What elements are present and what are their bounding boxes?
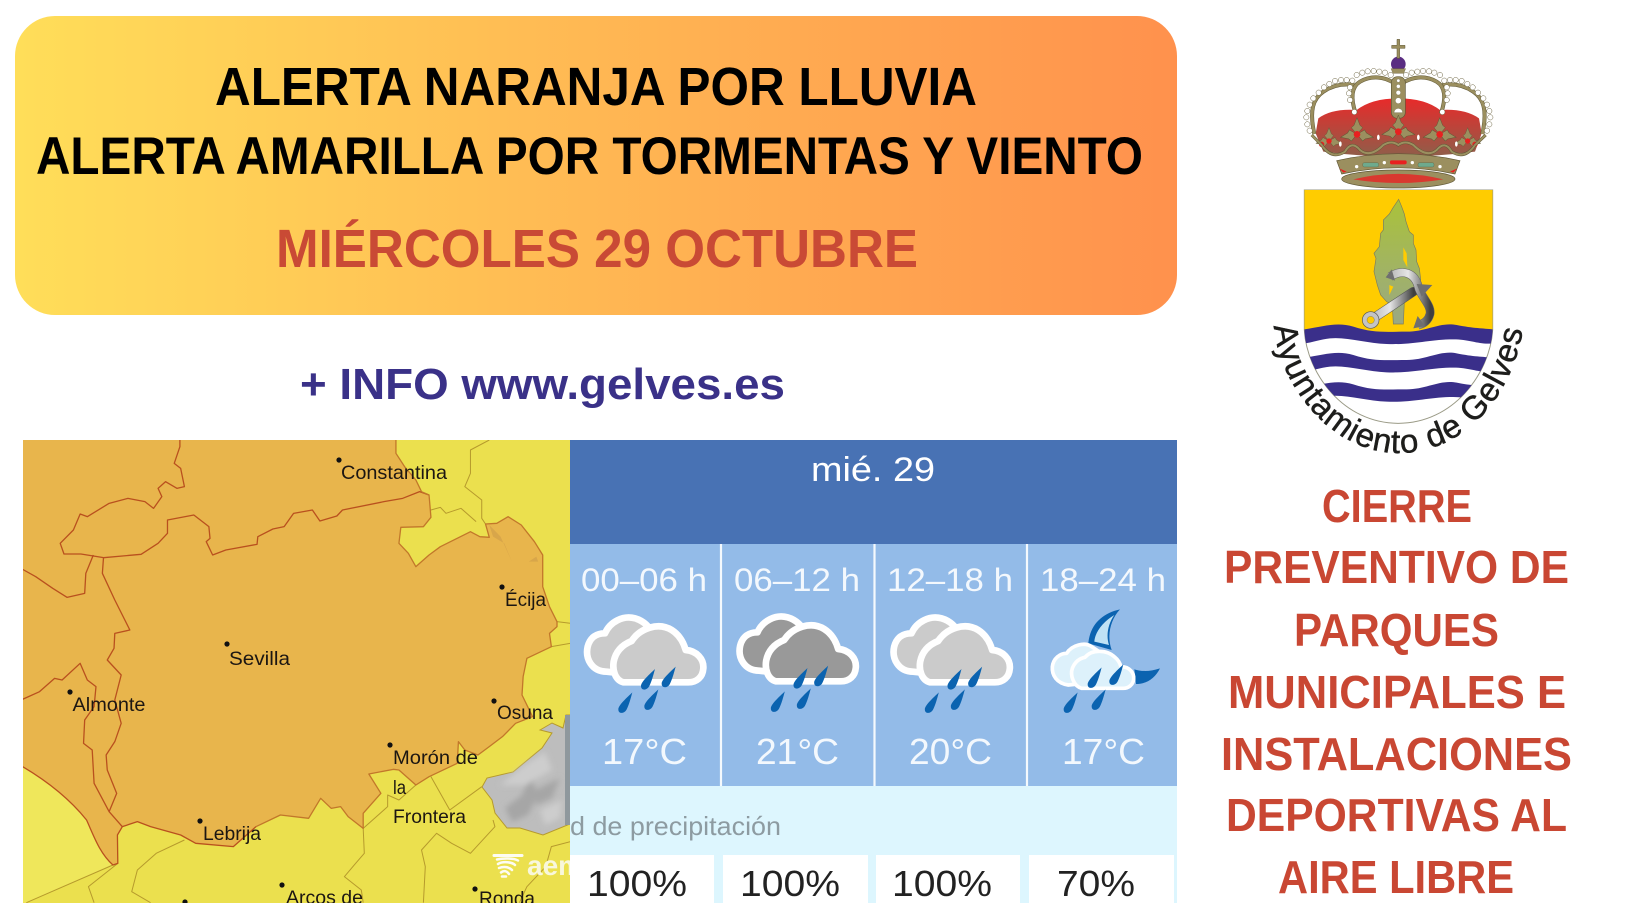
city labels: Morón de bbox=[393, 747, 478, 769]
icon: orb and cross bbox=[1391, 39, 1406, 73]
city labels: Arcos de bbox=[286, 887, 363, 909]
icon: waves bbox=[1304, 324, 1493, 402]
precipitation percentages: 100% bbox=[587, 863, 687, 904]
time slot labels: 12–18 h bbox=[887, 562, 1013, 598]
AEMET logo watermark bbox=[492, 854, 570, 878]
map base: yellow warning zone bbox=[23, 440, 570, 903]
time slot labels: 18–24 h bbox=[1040, 562, 1166, 598]
text: preventive closure notice bbox=[1221, 480, 1572, 903]
city labels: la bbox=[393, 777, 406, 799]
AEMET logo watermark: aemet bbox=[527, 850, 608, 881]
grey terrain outside warning zones bbox=[482, 715, 570, 835]
time slot labels bbox=[582, 568, 1164, 592]
text: preventive closure notice: MUNICIPALES E bbox=[1228, 666, 1566, 718]
heading: orange rain alert: ALERTA NARANJA POR LLUVIA bbox=[215, 57, 977, 117]
city labels: Constantina bbox=[341, 462, 447, 484]
city labels bbox=[72, 462, 553, 910]
temperature labels bbox=[604, 738, 1144, 764]
precipitation percentages: 70% bbox=[1057, 863, 1135, 904]
city labels: Almonte bbox=[72, 694, 146, 716]
text: Ayuntamiento de Gelves: Ayuntamiento de Gelves bbox=[1272, 326, 1522, 454]
panel: warning map bbox=[23, 440, 608, 910]
icon: night rain cloud with moon 18-24 bbox=[1052, 609, 1160, 713]
text: preventive closure notice: AIRE LIBRE bbox=[1278, 851, 1514, 903]
precipitation background bbox=[570, 786, 1177, 903]
time slot labels: 06–12 h bbox=[734, 562, 860, 598]
icon: rain cloud 12-18 bbox=[894, 617, 1010, 713]
text: preventive closure notice: DEPORTIVAS AL bbox=[1226, 789, 1567, 841]
time slot labels: 00–06 h bbox=[581, 562, 707, 598]
precipitation percentages bbox=[590, 870, 1134, 896]
heading: yellow storm and wind alert: ALERTA AMARILLA POR TORMENTAS Y VIENTO bbox=[36, 127, 1143, 186]
text: preventive closure notice: PREVENTIVO DE bbox=[1224, 541, 1569, 593]
forecast time slots background bbox=[570, 544, 1177, 786]
temperature labels: 17°C bbox=[602, 731, 687, 772]
city labels: Osuna bbox=[497, 702, 553, 724]
heading: date: MIÉRCOLES 29 OCTUBRE bbox=[276, 219, 918, 279]
panel: weather forecast bbox=[570, 440, 1177, 904]
shield bbox=[1304, 190, 1493, 423]
text: preventive closure notice: INSTALACIONES bbox=[1221, 728, 1572, 780]
precipitation percentages: 100% bbox=[740, 863, 840, 904]
precipitation cells bbox=[570, 855, 1174, 903]
icon: cypress tree and anchor bbox=[1362, 199, 1432, 328]
temperature labels: 21°C bbox=[756, 731, 839, 772]
precipitation label: d de precipitación bbox=[570, 811, 781, 841]
icon: dark rain cloud 06-12 bbox=[740, 616, 856, 712]
header gradient background bbox=[15, 16, 1177, 315]
map regions and boundaries bbox=[23, 440, 570, 903]
crest: Ayuntamiento de Gelves bbox=[1272, 39, 1522, 454]
text: preventive closure notice: PARQUES bbox=[1294, 604, 1499, 656]
city labels: Écija bbox=[505, 588, 546, 611]
city labels: Frontera bbox=[393, 806, 466, 828]
day header bar bbox=[570, 440, 1177, 544]
panel: alert header bbox=[15, 16, 1177, 315]
city markers bbox=[67, 457, 505, 905]
precipitation percentages: 100% bbox=[892, 863, 992, 904]
temperature labels: 17°C bbox=[1062, 731, 1145, 772]
city labels: Ronda bbox=[479, 888, 535, 910]
temperature labels: 20°C bbox=[909, 731, 992, 772]
text: more info link: + INFO www.gelves.es bbox=[300, 360, 785, 409]
city labels: Lebrija bbox=[203, 823, 261, 845]
city labels: Sevilla bbox=[229, 648, 290, 670]
text: preventive closure notice: CIERRE bbox=[1322, 480, 1472, 532]
icon: royal crown bbox=[1304, 39, 1493, 188]
column separators bbox=[721, 544, 1027, 786]
icon: rain cloud 00-06 bbox=[587, 617, 703, 713]
day label: mié. 29 bbox=[811, 451, 935, 489]
